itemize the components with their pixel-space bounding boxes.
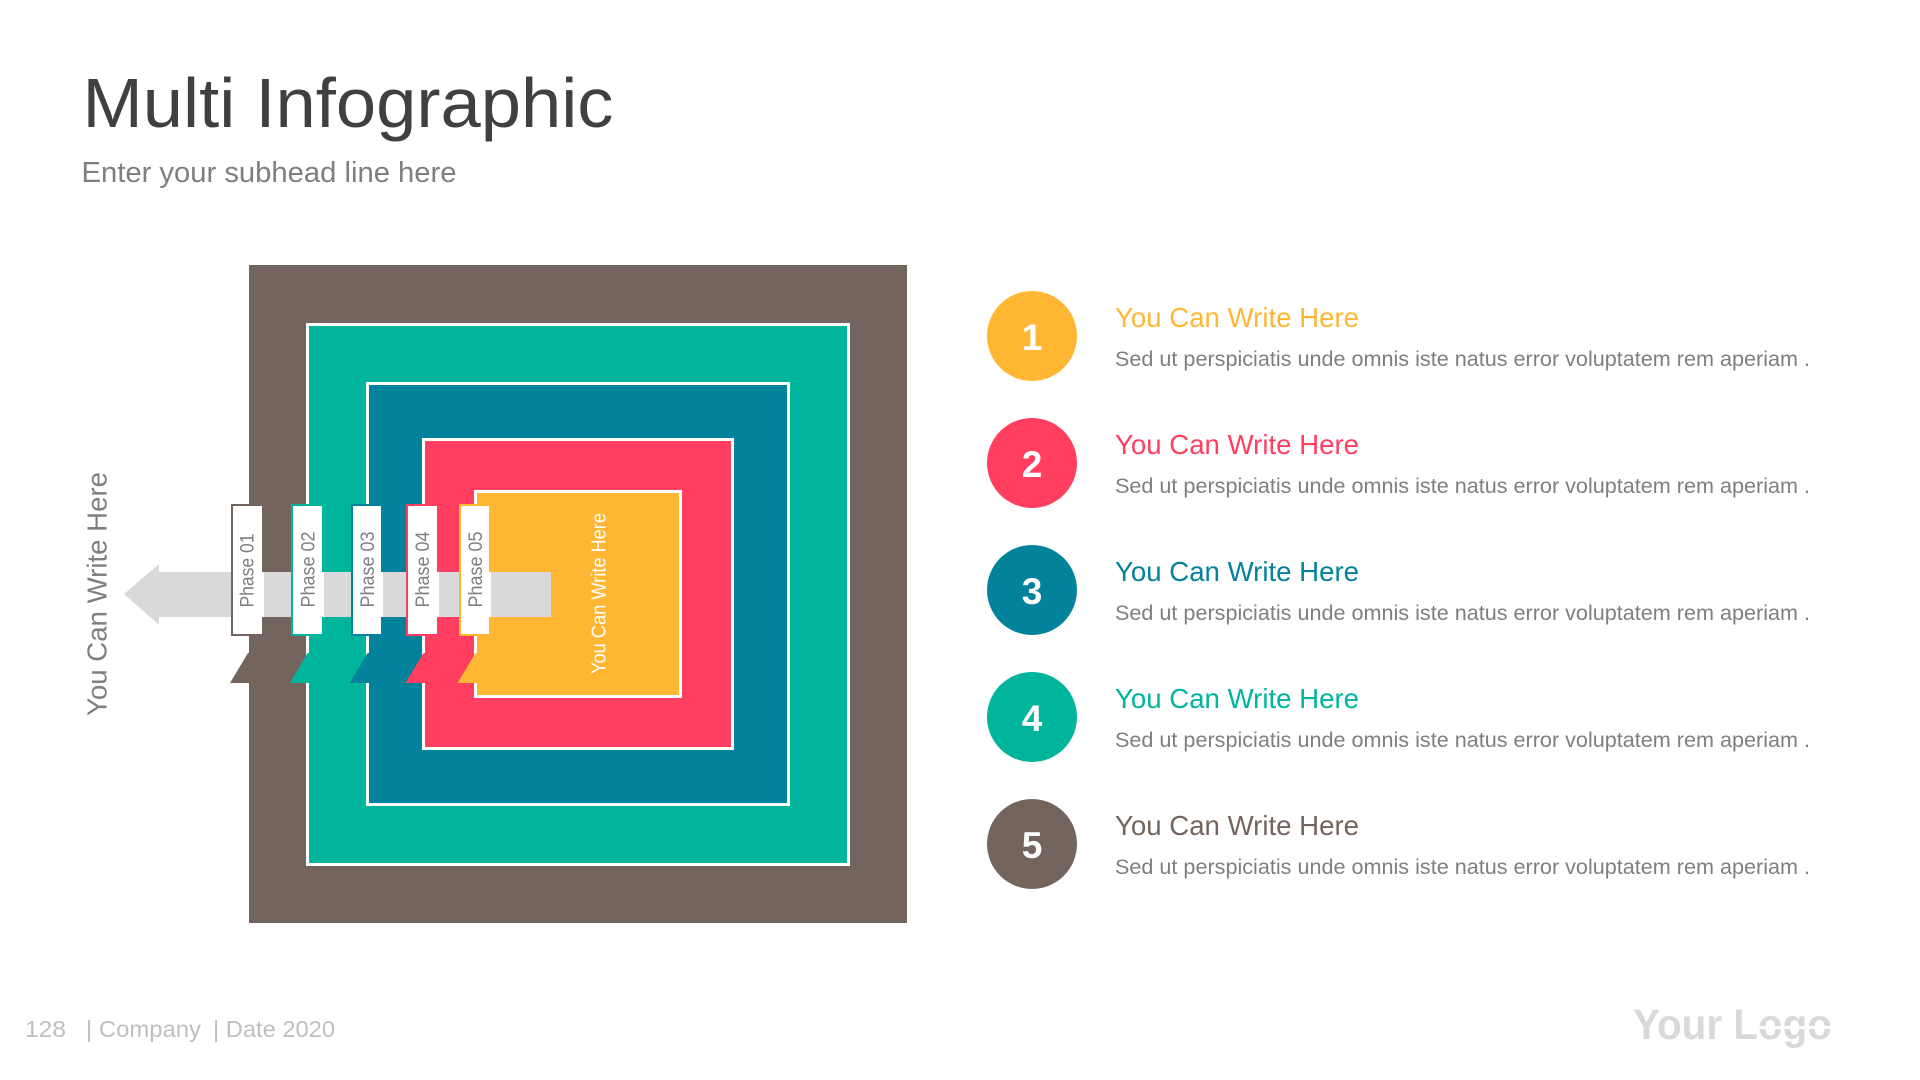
list item 5: Sed ut perspiciatis unde omnis iste natus error voluptatem rem aperiam . (1115, 856, 1810, 879)
vertical side label: You Can Write Here (82, 472, 112, 716)
center label: You Can Write Here (588, 513, 610, 674)
subhead: Enter your subhead line here (82, 157, 456, 189)
list item 2: Sed ut perspiciatis unde omnis iste natus error voluptatem rem aperiam . (1115, 475, 1810, 498)
list item 1 (987, 291, 1810, 381)
flag: phase 01: Phase 01 (238, 534, 258, 608)
square: level 1 brown (249, 265, 907, 923)
list item 4: Sed ut perspiciatis unde omnis iste natus error voluptatem rem aperiam . (1115, 729, 1810, 752)
list item 3: You Can Write Here (1115, 556, 1359, 587)
flag: phase 03: Phase 03 (358, 532, 379, 608)
list item 4 (987, 672, 1810, 762)
square: level 4 red (424, 440, 732, 748)
flag: phase 01 (230, 504, 264, 683)
list item 5: 5 (1022, 825, 1042, 866)
flag: phase 04: Phase 04 (413, 531, 434, 608)
flag: phase 02: Phase 02 (298, 532, 320, 608)
flag: phase 05 (458, 504, 491, 683)
flag: phase 03 (350, 504, 383, 683)
footer: page, company and date: | Company (86, 1016, 201, 1042)
list item 3: 3 (1022, 571, 1042, 612)
footer: page, company and date: 128 (25, 1016, 66, 1042)
square: level 5 yellow (476, 492, 680, 696)
nested squares chart (124, 265, 907, 923)
list item 2: You Can Write Here (1115, 429, 1359, 460)
list item 5: You Can Write Here (1115, 810, 1359, 841)
flag: phase 02 (290, 504, 324, 683)
list item 4: 4 (1022, 698, 1043, 739)
list item 1: 1 (1022, 317, 1042, 358)
footer: page, company and date: | Date 2020 (213, 1016, 335, 1042)
flag: phase 05: Phase 05 (466, 532, 487, 608)
arrow: grey pointing left (124, 564, 551, 625)
square: level 2 teal (308, 324, 848, 864)
list item 5 (987, 799, 1810, 889)
list item 1: You Can Write Here (1115, 302, 1359, 333)
flag: phase 04 (406, 504, 439, 683)
list item 4: You Can Write Here (1115, 683, 1359, 714)
square: level 3 blue (368, 384, 788, 804)
list item 3 (987, 545, 1810, 635)
list item 1: Sed ut perspiciatis unde omnis iste natus error voluptatem rem aperiam . (1115, 348, 1810, 371)
list item 2: 2 (1022, 444, 1042, 485)
title: Multi Infographic (82, 64, 614, 142)
list item 3: Sed ut perspiciatis unde omnis iste natus error voluptatem rem aperiam . (1115, 602, 1810, 625)
list item 2 (987, 418, 1810, 508)
footer: page, company and date (25, 1016, 335, 1042)
logo placeholder: Your Logo (1633, 1001, 1832, 1049)
